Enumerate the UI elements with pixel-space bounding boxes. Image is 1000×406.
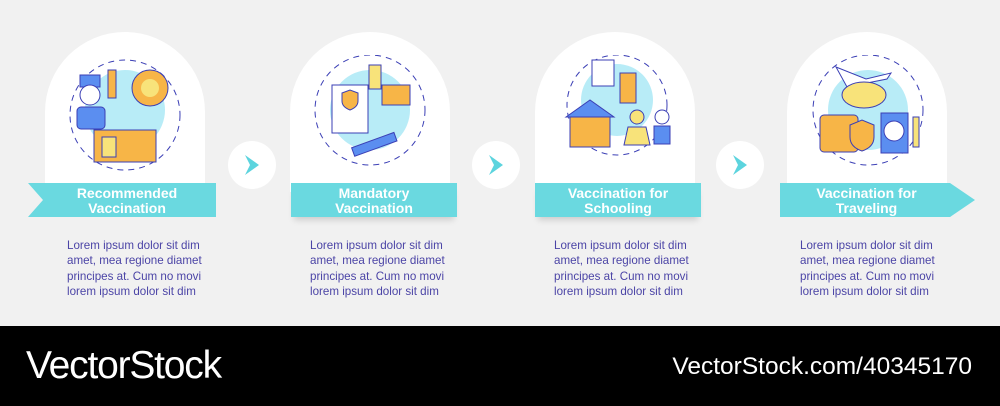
arrow 3 [716, 141, 764, 189]
footer logo: VectorStock [26, 344, 221, 387]
card 3 arch [535, 32, 695, 192]
icon: schooling [564, 55, 670, 156]
card 4 arch [787, 32, 947, 192]
banner 4: Traveling [836, 200, 897, 216]
banner 3: Schooling [584, 200, 652, 216]
arrow 2 [472, 141, 520, 189]
banner 4: Vaccination for [816, 185, 917, 201]
banner 1 [28, 183, 216, 217]
banner 2 [291, 183, 457, 217]
banner 2: Vaccination [335, 200, 413, 216]
banner 3 [535, 183, 701, 217]
description 4: Lorem ipsum dolor sit dim amet, mea regione diamet principes at. Cum no movi lorem ipsum dolor sit dim [800, 239, 935, 298]
icon: mandatory vaccination [314, 55, 426, 166]
description 3: Lorem ipsum dolor sit dim amet, mea regione diamet principes at. Cum no movi lorem ipsum dolor sit dim [554, 239, 689, 298]
banner 1: Vaccination [88, 200, 166, 216]
description 1: Lorem ipsum dolor sit dim amet, mea regione diamet principes at. Cum no movi lorem ipsum dolor sit dim [67, 239, 202, 298]
card 1 arch [45, 32, 205, 192]
banner 1: Recommended [77, 185, 177, 201]
footer bar [0, 326, 1000, 406]
icon: traveling [812, 55, 924, 166]
arrow 1 [228, 141, 276, 189]
banner 2: Mandatory [339, 185, 409, 201]
banner 3: Vaccination for [568, 185, 668, 201]
icon: recommended vaccination [70, 60, 180, 170]
description 2: Lorem ipsum dolor sit dim amet, mea regione diamet principes at. Cum no movi lorem ipsum dolor sit dim [310, 239, 445, 298]
footer url: VectorStock.com/40345170 [672, 353, 972, 380]
banner 4 [780, 183, 975, 217]
card 2 arch [290, 32, 450, 192]
